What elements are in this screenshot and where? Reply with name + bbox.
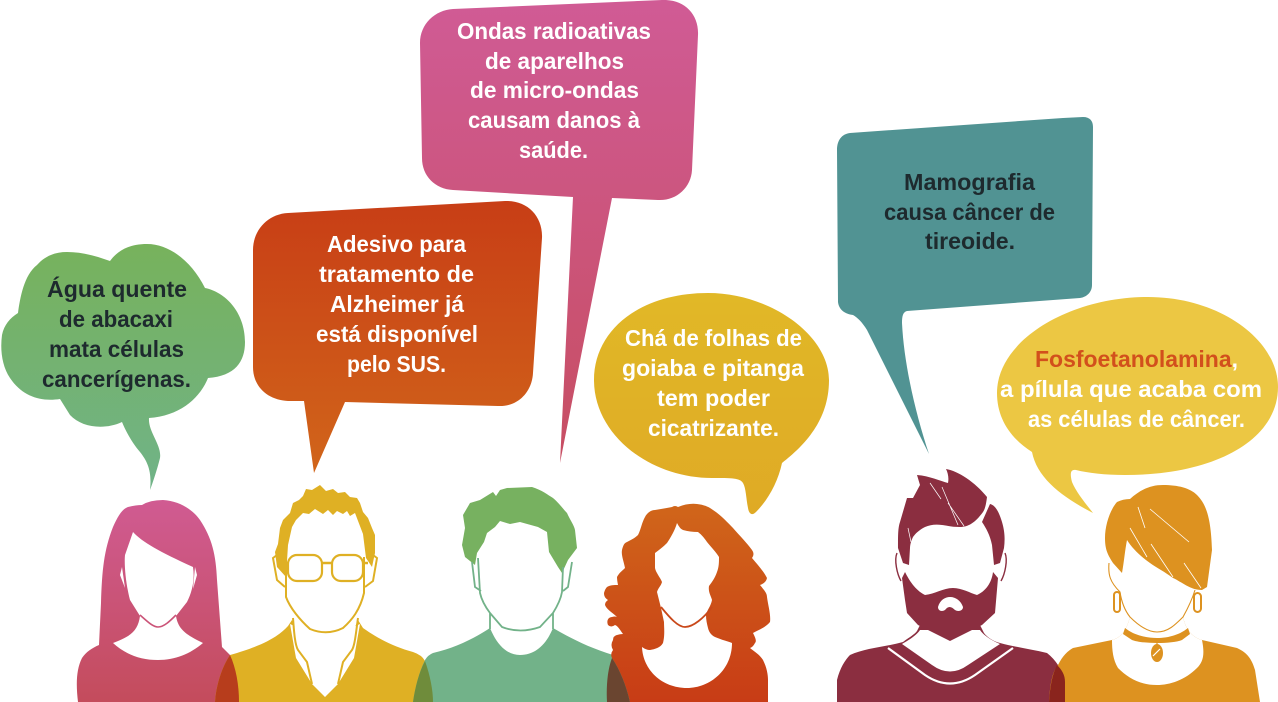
text: pink bubble	[457, 18, 651, 163]
text: pink bubble: saúde.	[519, 137, 588, 163]
text: orange bubble: pelo SUS.	[347, 351, 446, 377]
person: man with green hair	[413, 487, 630, 702]
text: yellow bubble: cicatrizante.	[648, 415, 779, 441]
person: woman with curly red hair	[604, 504, 770, 702]
person: man with glasses	[215, 485, 433, 702]
text: light yellow bubble	[1000, 346, 1262, 432]
text: yellow bubble: tem poder	[657, 385, 770, 411]
text: green bubble: cancerígenas.	[42, 366, 191, 392]
text: teal bubble: tireoide.	[925, 228, 1015, 254]
person: woman with pink hair	[77, 500, 239, 702]
person: woman with short orange hair	[1049, 485, 1260, 702]
speech bubble: teal	[837, 117, 1093, 454]
text: orange bubble: Adesivo para	[327, 231, 466, 257]
speech bubble: green cloud	[1, 244, 245, 490]
text: yellow bubble: Chá de folhas de	[625, 325, 802, 351]
text: light yellow bubble: as células de câncer.	[1028, 406, 1245, 432]
text: green bubble: de abacaxi	[59, 306, 173, 332]
speech bubble: orange	[253, 201, 542, 473]
text: yellow bubble: goiaba e pitanga	[622, 355, 804, 381]
overlap: green and red shoulders	[607, 658, 630, 702]
text: pink bubble: de micro-ondas	[470, 77, 639, 103]
text: pink bubble: Ondas radioativas	[457, 18, 651, 44]
speech bubble: pink	[420, 0, 698, 463]
text: orange bubble: Alzheimer já	[330, 291, 464, 317]
text: teal bubble: Mamografia	[904, 169, 1035, 195]
text: green bubble	[42, 275, 191, 392]
text: teal bubble	[884, 169, 1055, 254]
text: orange bubble: tratamento de	[319, 261, 474, 287]
speech bubble: light yellow	[997, 297, 1278, 513]
text: orange bubble	[316, 231, 478, 377]
text: light yellow bubble: Fosfoetanolamina,	[1035, 346, 1238, 372]
speech bubble: yellow	[594, 293, 829, 514]
overlap: pink and yellow shoulders	[215, 655, 239, 702]
overlap: maroon and orange shoulders	[1049, 665, 1065, 702]
text: green bubble: mata células	[49, 336, 184, 362]
text: orange bubble: está disponível	[316, 321, 478, 347]
text: light yellow bubble: a pílula que acaba com	[1000, 376, 1262, 402]
text: pink bubble: de aparelhos	[485, 48, 624, 74]
overlap: yellow and green shoulders	[413, 661, 433, 702]
person: bearded man	[837, 469, 1065, 702]
text: teal bubble: causa câncer de	[884, 199, 1055, 225]
text: green bubble: Água quente	[47, 275, 187, 302]
text: pink bubble: causam danos à	[468, 107, 640, 133]
text: yellow bubble	[622, 325, 804, 441]
